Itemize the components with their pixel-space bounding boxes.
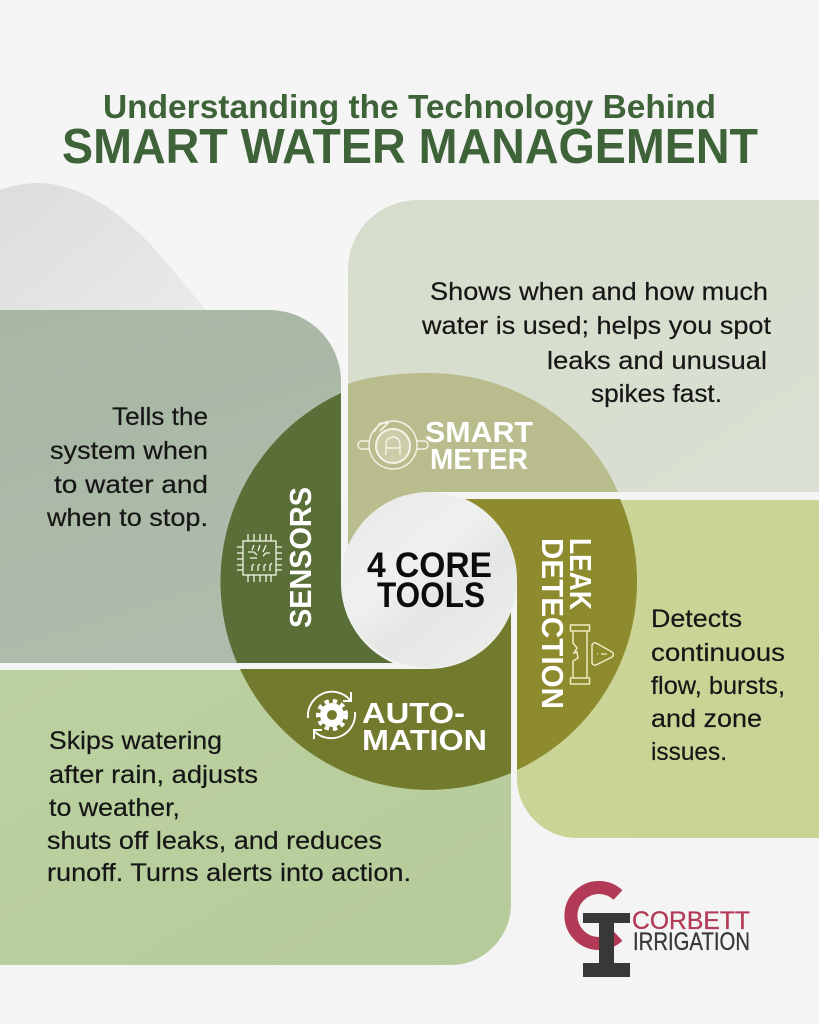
panel: automation description (0, 670, 511, 965)
text: smart meter description: Shows when and how much (430, 278, 768, 306)
panel: sensors description (0, 310, 341, 663)
label: smart meter (425, 417, 533, 476)
text: smart meter description: spikes fast. (591, 380, 722, 408)
center label: 4 CORE (367, 546, 492, 585)
center label: TOOLS (377, 576, 485, 615)
wedge: sensors (220, 393, 393, 663)
text: smart meter description: water is used; helps you spot (421, 312, 771, 340)
text: sensors description: system when (50, 437, 208, 465)
text: leak detection description (651, 605, 785, 766)
center label (367, 546, 492, 615)
center circle (341, 492, 517, 668)
text: leak detection description: issues. (651, 738, 727, 766)
label: sensors: SENSORS (283, 487, 318, 628)
text: automation description (47, 727, 411, 887)
icon: sensor chip (237, 534, 282, 582)
logo: CORBETT (632, 907, 750, 935)
text: automation description: Skips watering (49, 727, 222, 755)
label: automation (362, 698, 487, 757)
wedge: leak detection (465, 499, 637, 770)
text: automation description: runoff. Turns alerts into action. (47, 859, 411, 887)
icon: automation gear (308, 692, 355, 739)
text: leak detection description: and zone (651, 705, 762, 733)
icon: smart meter (358, 421, 428, 469)
logo (571, 888, 750, 977)
label: leak detection (535, 538, 598, 709)
text: smart meter description: leaks and unusual (547, 347, 767, 375)
text: leak detection description: continuous (651, 639, 785, 667)
text: automation description: after rain, adjusts (49, 761, 258, 789)
label: automation: AUTO- (362, 698, 465, 730)
logo: IRRIGATION (633, 928, 750, 956)
panel: smart meter description (348, 200, 819, 512)
wedge: smart meter (348, 373, 618, 546)
icon: leaking pipe (570, 625, 613, 684)
title: Understanding the Technology Behind (103, 88, 716, 125)
label: automation: MATION (362, 725, 487, 757)
title (62, 88, 758, 174)
text: automation description: shuts off leaks, and reduces (47, 827, 382, 855)
label: smart meter: METER (430, 444, 528, 476)
wedge: automation (240, 612, 511, 790)
text: sensors description: when to stop. (46, 504, 208, 532)
text: smart meter description (421, 278, 771, 408)
text: sensors description: to water and (54, 471, 208, 499)
title: SMART WATER MANAGEMENT (62, 120, 758, 174)
text: sensors description (46, 403, 208, 532)
label: leak detection: DETECTION (535, 538, 570, 709)
text: leak detection description: flow, bursts, (651, 672, 785, 700)
text: automation description: to weather, (49, 794, 180, 822)
text: leak detection description: Detects (651, 605, 742, 633)
label: leak detection: LEAK (563, 538, 598, 611)
panel: leak detection description (517, 500, 819, 838)
label: smart meter: SMART (425, 417, 533, 449)
text: sensors description: Tells the (112, 403, 208, 431)
